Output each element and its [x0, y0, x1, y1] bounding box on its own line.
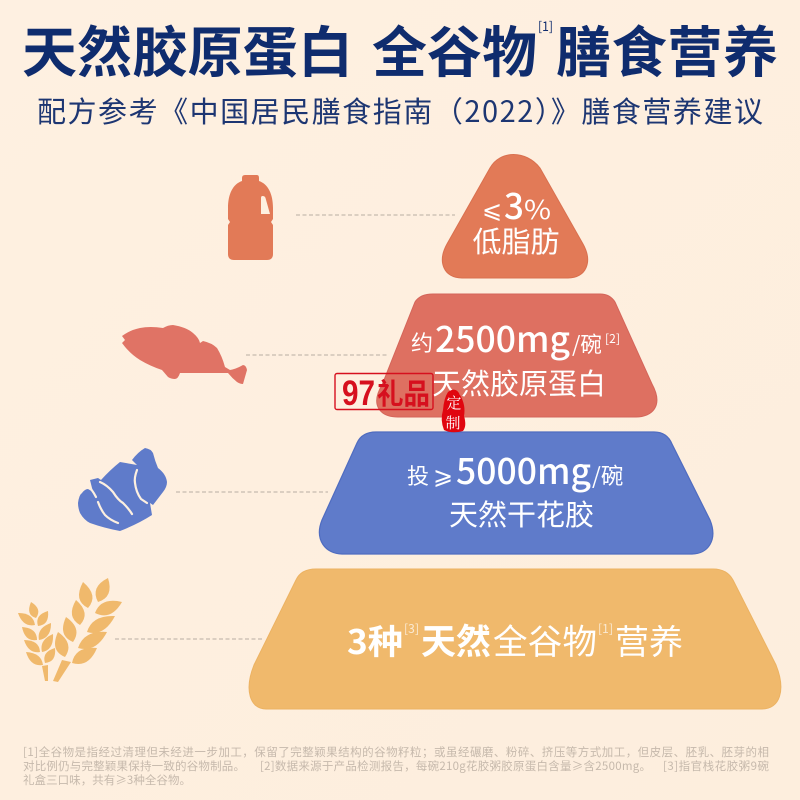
whole grain label: 3种: [347, 615, 403, 664]
stamp: custom seal: 制: [445, 412, 461, 433]
footnotes: 礼盒三口味，共有≥3种全谷物。: [23, 772, 191, 788]
subtitle: 配方参考《中国居民膳食指南（2022）》膳食营养建议: [37, 89, 763, 131]
flower maw value: ⩾: [433, 462, 453, 490]
low fat value: 3: [504, 179, 524, 230]
stamp: 97 gift logo: 97: [342, 374, 375, 413]
whole grain label: [347, 614, 683, 665]
title: [22, 8, 778, 88]
panel: low fat tier: [442, 154, 588, 278]
title: 天然胶原蛋白: [22, 8, 353, 88]
low fat label: 低脂肪: [472, 219, 560, 261]
title: 膳食营养: [556, 8, 778, 88]
low fat value: %: [524, 190, 551, 227]
collagen value: 约: [411, 326, 433, 358]
collagen value: [2]: [605, 330, 620, 347]
whole grain label: [1]: [598, 620, 613, 637]
collagen value: /碗: [572, 328, 602, 359]
stamp: custom seal: [442, 390, 465, 433]
flower maw value: [407, 444, 623, 495]
low fat value: [482, 179, 551, 230]
footnotes: [23, 744, 770, 788]
icon: oil bottle: [228, 175, 273, 260]
title: [1]: [538, 16, 553, 35]
collagen label: 天然胶原蛋白: [432, 361, 606, 403]
collagen value: [411, 312, 620, 363]
footnotes: [2]数据来源于产品检测报告，每碗210g花胶粥胶原蛋白含量≥含2500mg。: [260, 758, 651, 774]
stamp: custom seal: 定: [446, 392, 462, 413]
footnotes: 对比例仍与完整颖果保持一致的谷物制品。: [23, 758, 245, 774]
flower maw value: 5000mg: [456, 444, 591, 495]
flower maw value: 投: [407, 459, 429, 491]
panel: flower maw tier: [319, 432, 713, 554]
icon: flower maw: [78, 448, 167, 531]
icon: wheat: [18, 578, 122, 682]
low fat value: ⩽: [482, 196, 502, 224]
panel: whole grain tier: [249, 569, 781, 709]
whole grain label: 天然: [421, 614, 491, 665]
leader lines: [115, 215, 455, 639]
footnotes: [3]指官栈花胶粥9碗: [663, 758, 770, 774]
flower maw label: 天然干花胶: [449, 492, 594, 534]
whole grain label: [3]: [404, 620, 419, 637]
whole grain label: 全谷物: [493, 614, 597, 664]
flower maw value: /碗: [592, 459, 623, 491]
icon: fish: [122, 325, 247, 384]
stamp: 97 gift logo: 礼品: [377, 371, 430, 413]
stamp: 97 gift logo: [335, 371, 433, 413]
footnotes: [1]全谷物是指经过清理但未经进一步加工，保留了完整颖果结构的谷物籽粒；或虽经碾磨、粉碎、挤压等方式加工，但皮层、胚乳、胚芽的相: [23, 744, 769, 760]
whole grain label: 营养: [615, 615, 683, 664]
collagen value: 2500mg: [435, 312, 570, 363]
panel: collagen tier: [377, 294, 657, 417]
title: 全谷物: [372, 8, 537, 88]
